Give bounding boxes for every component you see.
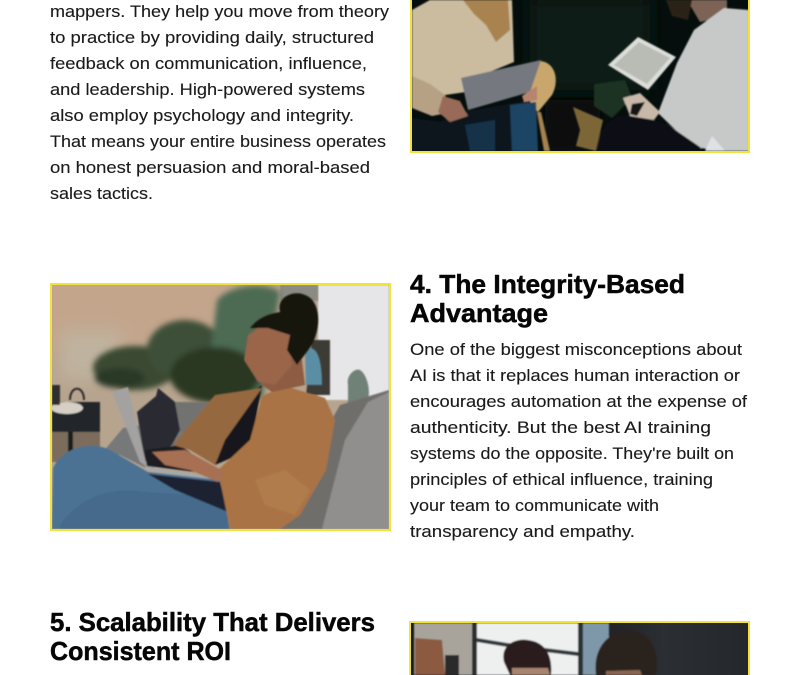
neck and face [260,356,306,392]
text block: section 4 body: authenticity. But the best AI training [410,418,711,437]
text block: section 3 body: to practice by providing daily, structured [50,28,374,47]
cushions [106,425,184,468]
tablet [608,37,676,90]
hair [463,0,510,42]
man shirt [658,8,749,151]
text block: section 3 body: That means your entire business operates [50,132,386,151]
heading: section 5 [50,607,375,666]
man trousers [598,115,702,151]
woman sweater [412,0,514,95]
heading: section 5: 5. Scalability That Delivers [50,607,375,637]
window [318,285,389,400]
photo: woman on sofa using laptop [40,275,391,531]
photo: two colleagues with laptop and tablet [410,0,750,153]
photo: two men in an office [409,621,750,675]
heading: section 4 [410,269,685,328]
text block: section 4 body: systems do the opposite. They're built on [410,444,734,463]
text block: section 4 body: transparency and empathy. [410,522,635,541]
chair back [526,61,556,112]
text block: section 3 body [50,2,390,203]
text block: section 4 body: principles of ethical influence, training [410,470,713,489]
wall [52,285,232,346]
text block: section 4 body: your team to communicate with [410,496,659,515]
head left [503,640,551,675]
basket and plant [573,107,603,151]
jeans [52,446,230,529]
laptop [461,60,541,110]
text block: section 3 body: and leadership. High-powered systems [50,80,365,99]
text block: section 4 body [410,340,747,541]
man head [687,0,727,22]
head right [595,630,657,675]
heading: section 4: 4. The Integrity-Based [410,269,685,299]
text block: section 3 body: also employ psychology and integrity. [50,106,354,125]
text block: section 4 body: One of the biggest misconceptions about [410,340,742,359]
laptop [112,387,147,467]
jacket [218,386,335,529]
text block: section 4 body: AI is that it replaces human interaction or [410,366,740,385]
text block: section 3 body: sales tactics. [50,184,153,203]
top [215,385,262,465]
heading: section 5: Consistent ROI [50,636,231,666]
text block: section 3 body: on honest persuasion and moral-based [50,158,370,177]
heading: section 4: Advantage [410,298,548,328]
sofa [270,390,389,529]
plant [93,286,280,403]
hair [250,293,318,365]
text block: section 3 body: feedback on communication, influence, [50,54,367,73]
text block: section 3 body: mappers. They help you move from theory [50,2,390,21]
hands [438,96,468,122]
left table [52,402,100,432]
wrist [623,93,660,120]
woman jeans [411,100,538,151]
text block: section 4 body: encourages automation at the expense of [410,392,747,411]
hands [152,450,225,482]
